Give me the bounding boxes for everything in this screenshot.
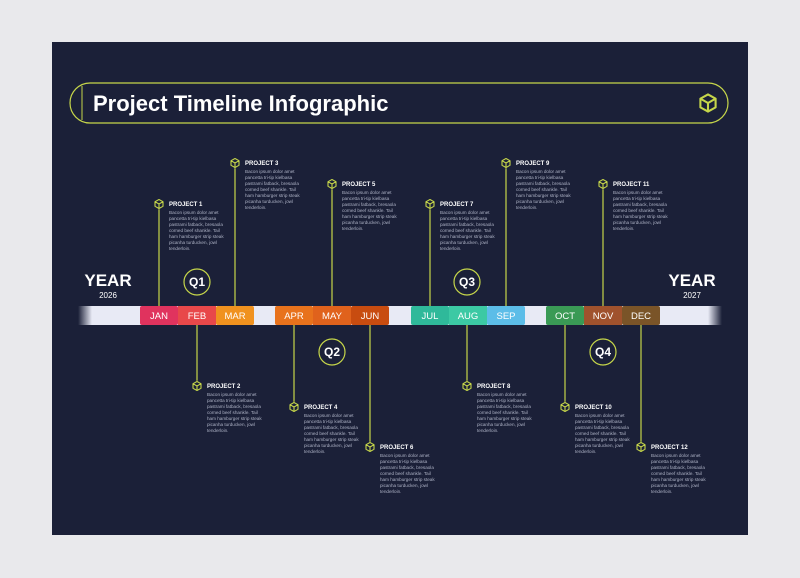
- project 12: pancetta tri-tip kielbasa: [651, 459, 699, 464]
- project 7: picanha turducken, jowl: [440, 240, 488, 245]
- project 10: pastrami fatback, bresaola: [575, 425, 629, 430]
- project 11: tenderloin.: [613, 226, 634, 231]
- project 7: corned beef shankle. Tail: [440, 228, 491, 233]
- project 11: pancetta tri-tip kielbasa: [613, 196, 661, 201]
- project 6: PROJECT 6: [380, 445, 414, 451]
- title: Project Timeline Infographic: [93, 91, 388, 116]
- project 2: [192, 381, 262, 433]
- project 10: pancetta tri-tip kielbasa: [575, 419, 623, 424]
- project 6: picanha turducken, jowl: [380, 483, 428, 488]
- project 3: pancetta tri-tip kielbasa: [245, 175, 293, 180]
- project 3: Bacon ipsum dolor amet: [245, 169, 295, 174]
- project 12: [636, 442, 706, 494]
- icon: cube: [698, 93, 718, 113]
- project 6: Bacon ipsum dolor amet: [380, 453, 430, 458]
- project 8: Bacon ipsum dolor amet: [477, 392, 527, 397]
- title bar: [70, 83, 728, 123]
- project 3: pastrami fatback, bresaola: [245, 181, 299, 186]
- project 2: PROJECT 2: [207, 384, 241, 390]
- project 10: picanha turducken, jowl: [575, 443, 623, 448]
- project 6: pancetta tri-tip kielbasa: [380, 459, 428, 464]
- panel: dark background: [52, 42, 748, 535]
- timeline bar: OCT: [555, 311, 575, 322]
- timeline bar: SEP: [496, 311, 516, 322]
- timeline bar: APR: [284, 311, 304, 322]
- timeline bar: JUL: [422, 311, 438, 322]
- project 1: ham hamburger strip steak: [169, 234, 224, 239]
- timeline bar: [78, 306, 722, 325]
- timeline bar: JUN: [361, 311, 379, 322]
- infographic: Q1: [189, 275, 205, 289]
- project 12: pastrami fatback, bresaola: [651, 465, 705, 470]
- project 7: tenderloin.: [440, 246, 461, 251]
- infographic: Q2: [324, 345, 340, 359]
- project 9: tenderloin.: [516, 205, 537, 210]
- year 2026: 2026: [99, 291, 117, 300]
- project 9: ham hamburger strip steak: [516, 193, 571, 198]
- stems: [159, 163, 641, 447]
- project 1: [154, 199, 224, 251]
- project 12: Bacon ipsum dolor amet: [651, 453, 701, 458]
- project 6: corned beef shankle. Tail: [380, 471, 431, 476]
- quarter badges: [184, 269, 616, 365]
- project 1: PROJECT 1: [169, 202, 203, 208]
- project 8: ham hamburger strip steak: [477, 416, 532, 421]
- project 4: PROJECT 4: [304, 405, 338, 411]
- year 2026: YEAR: [84, 271, 132, 290]
- project 12: corned beef shankle. Tail: [651, 471, 702, 476]
- project 8: pastrami fatback, bresaola: [477, 404, 531, 409]
- year 2026: [84, 271, 132, 300]
- project 5: pastrami fatback, bresaola: [342, 202, 396, 207]
- year 2027: 2027: [683, 291, 701, 300]
- project 9: [501, 158, 571, 210]
- project 5: [327, 179, 397, 231]
- project 7: [425, 199, 495, 251]
- project 3: picanha turducken, jowl: [245, 199, 293, 204]
- project 1: pancetta tri-tip kielbasa: [169, 216, 217, 221]
- project 4: picanha turducken, jowl: [304, 443, 352, 448]
- project 5: tenderloin.: [342, 226, 363, 231]
- project 10: [560, 402, 630, 454]
- timeline bar: FEB: [188, 311, 206, 322]
- project 4: [289, 402, 359, 454]
- project 6: pastrami fatback, bresaola: [380, 465, 434, 470]
- project 5: pancetta tri-tip kielbasa: [342, 196, 390, 201]
- project 2: corned beef shankle. Tail: [207, 410, 258, 415]
- project 3: [230, 158, 300, 210]
- project 3: tenderloin.: [245, 205, 266, 210]
- project 7: ham hamburger strip steak: [440, 234, 495, 239]
- project 2: ham hamburger strip steak: [207, 416, 262, 421]
- project 1: Bacon ipsum dolor amet: [169, 210, 219, 215]
- project 5: Bacon ipsum dolor amet: [342, 190, 392, 195]
- project 11: PROJECT 11: [613, 182, 650, 188]
- project 7: pastrami fatback, bresaola: [440, 222, 494, 227]
- project 7: pancetta tri-tip kielbasa: [440, 216, 488, 221]
- project 10: ham hamburger strip steak: [575, 437, 630, 442]
- project 9: corned beef shankle. Tail: [516, 187, 567, 192]
- project 7: PROJECT 7: [440, 202, 474, 208]
- project 9: Bacon ipsum dolor amet: [516, 169, 566, 174]
- timeline bar: MAR: [224, 311, 246, 322]
- project 1: picanha turducken, jowl: [169, 240, 217, 245]
- project 7: Bacon ipsum dolor amet: [440, 210, 490, 215]
- project 9: PROJECT 9: [516, 161, 550, 167]
- infographic: Q3: [459, 275, 475, 289]
- project 4: pastrami fatback, bresaola: [304, 425, 358, 430]
- project 4: tenderloin.: [304, 449, 325, 454]
- timeline bar: NOV: [593, 311, 614, 322]
- project 8: PROJECT 8: [477, 384, 511, 390]
- project 5: picanha turducken, jowl: [342, 220, 390, 225]
- project 6: tenderloin.: [380, 489, 401, 494]
- project 2: pastrami fatback, bresaola: [207, 404, 261, 409]
- project 3: corned beef shankle. Tail: [245, 187, 296, 192]
- project 1: corned beef shankle. Tail: [169, 228, 220, 233]
- project 12: picanha turducken, jowl: [651, 483, 699, 488]
- project 10: tenderloin.: [575, 449, 596, 454]
- project 12: tenderloin.: [651, 489, 672, 494]
- project 11: pastrami fatback, bresaola: [613, 202, 667, 207]
- project 4: ham hamburger strip steak: [304, 437, 359, 442]
- project 11: Bacon ipsum dolor amet: [613, 190, 663, 195]
- project 1: pastrami fatback, bresaola: [169, 222, 223, 227]
- project 8: corned beef shankle. Tail: [477, 410, 528, 415]
- project 11: ham hamburger strip steak: [613, 214, 668, 219]
- project 8: [462, 381, 532, 433]
- project 4: Bacon ipsum dolor amet: [304, 413, 354, 418]
- project 5: corned beef shankle. Tail: [342, 208, 393, 213]
- project 1: tenderloin.: [169, 246, 190, 251]
- project 6: [365, 442, 435, 494]
- infographic: Q4: [595, 345, 611, 359]
- project 8: tenderloin.: [477, 428, 498, 433]
- project 6: ham hamburger strip steak: [380, 477, 435, 482]
- project 11: picanha turducken, jowl: [613, 220, 661, 225]
- project 10: PROJECT 10: [575, 405, 612, 411]
- timeline bar: MAY: [322, 311, 343, 322]
- project 2: picanha turducken, jowl: [207, 422, 255, 427]
- project 11: [598, 179, 668, 231]
- project 3: ham hamburger strip steak: [245, 193, 300, 198]
- project 9: picanha turducken, jowl: [516, 199, 564, 204]
- project 2: Bacon ipsum dolor amet: [207, 392, 257, 397]
- project 8: picanha turducken, jowl: [477, 422, 525, 427]
- project 8: pancetta tri-tip kielbasa: [477, 398, 525, 403]
- timeline bar: AUG: [458, 311, 478, 322]
- project 4: corned beef shankle. Tail: [304, 431, 355, 436]
- project 11: corned beef shankle. Tail: [613, 208, 664, 213]
- project 5: ham hamburger strip steak: [342, 214, 397, 219]
- project 2: tenderloin.: [207, 428, 228, 433]
- project 2: pancetta tri-tip kielbasa: [207, 398, 255, 403]
- project 5: PROJECT 5: [342, 182, 376, 188]
- project 4: pancetta tri-tip kielbasa: [304, 419, 352, 424]
- timeline bar: JAN: [150, 311, 168, 322]
- year 2027: [668, 271, 716, 300]
- timeline bar: DEC: [631, 311, 651, 322]
- project 9: pancetta tri-tip kielbasa: [516, 175, 564, 180]
- project 3: PROJECT 3: [245, 161, 279, 167]
- project 12: PROJECT 12: [651, 445, 688, 451]
- year 2027: YEAR: [668, 271, 716, 290]
- project 9: pastrami fatback, bresaola: [516, 181, 570, 186]
- project 10: corned beef shankle. Tail: [575, 431, 626, 436]
- project 10: Bacon ipsum dolor amet: [575, 413, 625, 418]
- project labels: [154, 158, 706, 494]
- project 12: ham hamburger strip steak: [651, 477, 706, 482]
